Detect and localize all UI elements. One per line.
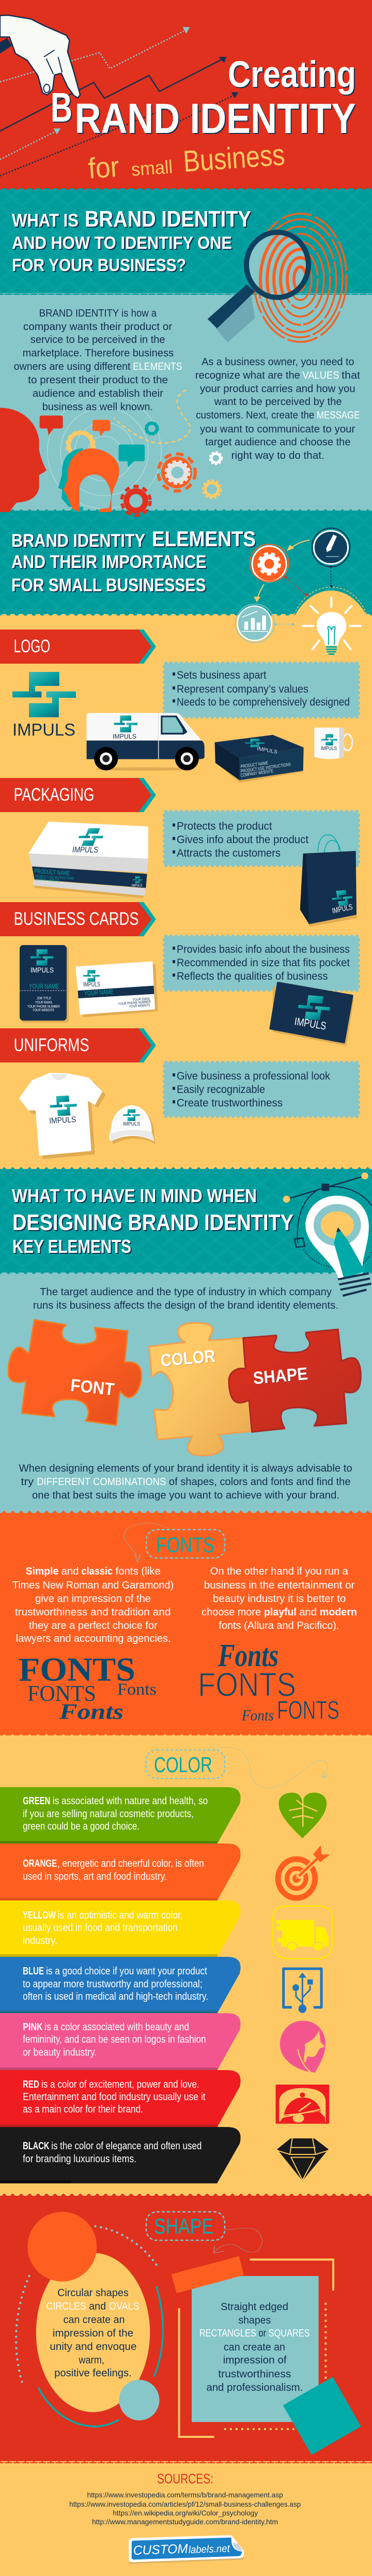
- text block: simple and classic fonts: they are a perfect choice for: [29, 1620, 158, 1631]
- business card: vertical navy: JOB TITLE: [37, 997, 51, 1000]
- panel: business cards: [0, 902, 359, 1046]
- banner: uniforms: UNIFORMS: [14, 1035, 89, 1055]
- heading: what is brand identity: FOR YOUR BUSINESS?: [12, 256, 186, 275]
- title: [51, 54, 356, 185]
- logo: customlabels.net sticker: CUSTOM: [133, 2541, 188, 2558]
- icon: fingerprint under magnifying glass: [208, 214, 347, 342]
- icon: mug: IMPULS: [321, 746, 337, 752]
- text: circular shapes: can create an: [64, 2314, 125, 2326]
- banner: business cards: [0, 902, 156, 936]
- icon: product box: COMPANY WEBSITE: [240, 768, 274, 778]
- heading: what is brand identity: [12, 206, 251, 275]
- color band: black: for branding luxurious items.: [23, 2153, 136, 2165]
- color band: blue: often is used in medical and high-tech industry.: [23, 1991, 208, 2002]
- title: Business: [182, 138, 286, 178]
- heading: brand identity elements: FOR SMALL BUSINESSES: [11, 575, 206, 595]
- decorative ovals and arcs: [16, 2212, 163, 2427]
- text block: simple and classic fonts: trustworthiness and tradition and: [15, 1607, 171, 1618]
- color band: pink: femininity, and can be seen on logos in fashion: [23, 2034, 206, 2045]
- text block: brand identity definition: [14, 308, 182, 413]
- decorative rectangles and lines: [171, 2256, 361, 2455]
- color band: green: GREEN: [23, 1795, 50, 1807]
- heading: what is brand identity: BRAND IDENTITY: [85, 206, 251, 232]
- text: straight edged shapes: SQUARES: [269, 2328, 310, 2339]
- bullet list: logo: [164, 663, 359, 717]
- color band: blue: BLUE: [23, 1966, 44, 1977]
- text block: simple and classic fonts: give an impression of the: [35, 1593, 151, 1605]
- business card: vertical navy: YOUR NAME: [29, 982, 59, 990]
- bullet list: uniforms: Give business a professional look: [177, 1070, 330, 1082]
- font samples: classic: Fonts: [59, 1700, 123, 1724]
- banner: business cards: BUSINESS CARDS: [14, 909, 139, 929]
- font samples: playful: Fonts: [218, 1638, 278, 1673]
- icon: mug: [314, 728, 352, 759]
- text: circular shapes: CIRCLES: [47, 2301, 86, 2312]
- text: circular shapes: warm,: [78, 2355, 104, 2366]
- text block: playful and modern fonts: modern: [320, 1607, 357, 1618]
- business card: horizontal white: YOUR PHONE NUMBER: [118, 1000, 151, 1006]
- bullet list: uniforms: [164, 1062, 359, 1116]
- icon: cap: IMPULS: [123, 1121, 140, 1127]
- text: circular shapes: positive feelings.: [54, 2368, 132, 2379]
- bullet list: packaging: [164, 812, 359, 865]
- font samples: classic: FONTS: [27, 1682, 96, 1706]
- color band: orange: [0, 1844, 241, 1901]
- growth arrows: [0, 27, 238, 176]
- bullet list: packaging: Attracts the customers: [177, 847, 281, 859]
- text: straight edged shapes: shapes: [238, 2315, 271, 2326]
- business card: vertical navy: YOUR WEBSITE: [33, 1009, 54, 1012]
- icon: delivery van: IMPULS: [113, 732, 136, 740]
- logo mark: impuls: IMPULS: [12, 720, 75, 739]
- text block: simple and classic fonts: [12, 1566, 174, 1644]
- label: fonts: FONTS: [156, 1533, 214, 1557]
- icon: product box: [214, 735, 304, 783]
- text: straight edged shapes: impression of: [223, 2355, 287, 2366]
- color band: pink: [0, 2013, 241, 2071]
- font samples: playful: FONTS: [277, 1696, 339, 1725]
- bullet list: packaging: Protects the product: [177, 820, 272, 832]
- text block: simple and classic fonts: fonts (like: [116, 1566, 161, 1577]
- color band: orange: ORANGE: [23, 1858, 57, 1869]
- text block: values and message: your product carries and how you: [200, 383, 355, 395]
- text block: simple and classic fonts: Times New Roman and Garamond): [12, 1580, 174, 1591]
- text: straight edged shapes: [199, 2301, 310, 2393]
- label: color: COLOR: [154, 1753, 212, 1777]
- icon: shopping bag: [300, 835, 357, 927]
- text block: different combinations: of shapes, colors and fonts and find the: [169, 1476, 351, 1488]
- business card: horizontal white: YOUR WEBSITE: [129, 1004, 150, 1009]
- color band: red: [0, 2070, 241, 2128]
- bullet list: business cards: Provides basic info about the business: [177, 943, 350, 955]
- sources: [69, 2471, 301, 2526]
- text block: playful and modern fonts: business in the entertainment or: [204, 1580, 355, 1591]
- icon: product box: PRODUCT NAME: [240, 760, 269, 769]
- color band: pink: or beauty industry.: [23, 2047, 97, 2058]
- color band: blue: [0, 1957, 241, 2014]
- sources: https://en.wikipedia.org/wiki/Color_psychology: [113, 2509, 258, 2517]
- bullet list: logo: Represent company’s values: [177, 683, 308, 695]
- icon: delivery truck: [273, 1906, 332, 1959]
- text block: different combinations: one that best suits the image you want to achieve with your brand.: [32, 1490, 339, 1501]
- text block: playful and modern fonts: On the other hand if you run a: [210, 1566, 349, 1577]
- text block: playful and modern fonts: beauty industry it is better to: [213, 1593, 346, 1605]
- icon: t-shirt: [19, 1073, 105, 1159]
- logo: customlabels.net sticker: labels.net: [188, 2543, 230, 2556]
- business card: vertical navy: [19, 945, 69, 1023]
- label: color: [146, 1747, 329, 1788]
- text block: values and message: As a business owner, you need to: [202, 356, 354, 368]
- text block: playful and modern fonts: and: [299, 1607, 317, 1618]
- text: circular shapes: impression of the: [53, 2328, 133, 2339]
- business card: horizontal white: [76, 962, 158, 1017]
- color band: red: Entertainment and food industry usually use it: [23, 2091, 206, 2103]
- font samples: classic: FONTS: [19, 1651, 135, 1688]
- text block: simple and classic fonts: and: [61, 1566, 79, 1577]
- color band: orange: used in sports, art and food industry.: [23, 1871, 167, 1882]
- text block: target audience: [33, 1286, 338, 1311]
- text: straight edged shapes: trustworthiness: [218, 2369, 291, 2380]
- icon: product box: PRODUCT USE INSTRUCTIONS: [240, 761, 291, 774]
- heading: what to have in mind: [12, 1185, 293, 1257]
- text block: brand identity definition: service to be perceived in the: [30, 334, 165, 346]
- icon: white packaging box: IMPULS: [72, 846, 98, 855]
- text: straight edged shapes: or: [258, 2328, 266, 2339]
- text: circular shapes: OVALS: [109, 2301, 140, 2312]
- icon: diamond: [277, 2138, 329, 2181]
- banner: packaging: PACKAGING: [14, 785, 95, 805]
- text block: simple and classic fonts: classic: [82, 1566, 113, 1577]
- color band: black: is the color of elegance and often used: [51, 2140, 202, 2152]
- label: fonts: [124, 1523, 225, 1562]
- text: circular shapes: and: [89, 2301, 106, 2312]
- text block: brand identity definition: BRAND IDENTITY is how a: [39, 308, 157, 319]
- text block: brand identity definition: marketplace. Therefore business: [23, 348, 174, 359]
- heading: brand identity elements: [11, 527, 256, 595]
- icon: cap: [110, 1105, 156, 1144]
- color band: orange: , energetic and cheerful color, is often: [57, 1858, 204, 1869]
- font samples: playful: Fonts: [241, 1707, 274, 1724]
- label: shape: SHAPE: [154, 2214, 213, 2238]
- icon: usb: [284, 1969, 321, 2013]
- icon: target with arrow: [278, 1845, 330, 1898]
- text block: brand identity definition: company wants their product or: [23, 321, 173, 333]
- text: circular shapes: unity and envoque: [50, 2341, 136, 2353]
- logo mark: impuls: [12, 672, 76, 739]
- heading: brand identity elements: ELEMENTS: [152, 527, 256, 551]
- color band: black: BLACK: [23, 2140, 50, 2152]
- color band: green: [0, 1787, 241, 1844]
- text block: different combinations: [19, 1463, 352, 1501]
- text block: playful and modern fonts: choose more: [202, 1607, 261, 1618]
- text block: values and message: MESSAGE: [317, 410, 360, 421]
- business card: vertical navy: YOUR EMAIL: [35, 1001, 53, 1005]
- heading: what is brand identity: AND HOW TO IDENTIFY ONE: [12, 233, 232, 253]
- text block: values and message: VALUES: [302, 370, 339, 381]
- panel: logo: [0, 630, 359, 783]
- bullet list: business cards: Reflects the qualities of business: [177, 970, 328, 982]
- color band: green: if you are selling natural cosmetic products,: [23, 1808, 194, 1820]
- panel: uniforms: [0, 1028, 359, 1159]
- color band: yellow: YELLOW: [23, 1910, 56, 1921]
- logo: customlabels.net sticker: [129, 2535, 244, 2564]
- text block: target audience: runs its business affects the design of the brand identity elements.: [33, 1300, 338, 1311]
- icon: white packaging box: COMPANY WEBSITE: [35, 878, 59, 883]
- icon: white packaging box: [28, 821, 148, 898]
- label: shape: SHAPE: [252, 1364, 308, 1388]
- color band: pink: PINK: [23, 2021, 43, 2033]
- panel: circular shapes: [16, 2212, 163, 2427]
- icon: leaf: [278, 1793, 327, 1838]
- text block: different combinations: When designing elements of your brand identity it is always advisable to: [19, 1463, 352, 1474]
- banner: logo: LOGO: [14, 636, 50, 656]
- text: straight edged shapes: RECTANGLES: [199, 2328, 256, 2339]
- text: circular shapes: [47, 2287, 140, 2379]
- text block: values and message: that: [342, 370, 360, 381]
- color band: red: RED: [23, 2079, 39, 2090]
- font samples: classic: Fonts: [117, 1680, 157, 1698]
- text block: target audience: The target audience and the type of industry in which company: [40, 1286, 332, 1298]
- text block: brand identity definition: ELEMENTS: [133, 361, 182, 372]
- color band: green: green could be a good choice.: [23, 1821, 140, 1832]
- color band: yellow: [0, 1900, 241, 1957]
- business card: horizontal white: YOUR NAME: [84, 987, 114, 997]
- color band: yellow: industry.: [23, 1935, 57, 1946]
- text block: values and message: want to be perceived by the: [214, 396, 342, 408]
- heading: what to have in mind: DESIGNING BRAND IDENTITY: [12, 1210, 293, 1235]
- color band: blue: is a good choice if you want your product: [46, 1966, 207, 1977]
- color band: yellow: is an optimistic and warm color,: [58, 1910, 183, 1921]
- text block: simple and classic fonts: lawyers and accounting agencies.: [16, 1633, 171, 1644]
- text: straight edged shapes: Straight edged: [221, 2301, 288, 2313]
- text block: different combinations: try: [21, 1476, 34, 1488]
- color band: blue: to appear more trustworthy and professional;: [23, 1979, 203, 1990]
- sources: http://www.managementstudyguide.com/brand-identity.htm: [92, 2518, 278, 2526]
- text block: simple and classic fonts: Simple: [26, 1566, 58, 1577]
- icon: pen tool light bulb: [283, 1173, 372, 1296]
- icon: white packaging box: IMPULS: [132, 884, 142, 888]
- bullet list: business cards: [164, 936, 359, 990]
- title: small: [131, 156, 173, 180]
- heading: brand identity elements: BRAND IDENTITY: [11, 531, 145, 551]
- text block: brand identity definition: to present their product to the: [28, 375, 168, 386]
- text block: playful and modern fonts: fonts (Allura and Pacifico).: [219, 1620, 339, 1631]
- business card: horizontal white: YOUR EMAIL: [133, 997, 150, 1002]
- panel: straight edged shapes: [171, 2256, 361, 2455]
- icon: hand walking on arrow: [0, 15, 80, 98]
- color band: pink: is a color associated with beauty and: [44, 2021, 189, 2033]
- text block: values and message: customers. Next, create the: [196, 410, 314, 421]
- color band: black: [0, 2127, 241, 2183]
- icon: product box: IMPULS: [256, 746, 278, 755]
- text block: values and message: target audience and choose the: [205, 437, 350, 448]
- sources: https://www.investopedia.com/articles/pf/12/small-business-challenges.asp: [69, 2500, 301, 2508]
- color band: yellow: usually used in food and transportation: [23, 1922, 178, 1934]
- heading: brand identity elements: AND THEIR IMPORTANCE: [11, 552, 206, 572]
- text: circular shapes: Circular shapes: [57, 2287, 129, 2299]
- font samples: playful: [198, 1638, 339, 1725]
- icon: delivery van: [87, 713, 205, 771]
- icon: shopping bag: IMPULS: [331, 903, 353, 916]
- color band: red: as a main color for their brand.: [23, 2104, 143, 2115]
- label: shape: [146, 2212, 262, 2253]
- icons: process diagram with light bulb: [236, 528, 368, 654]
- bullet list: uniforms: Create trustworthiness: [177, 1097, 283, 1109]
- puzzle pieces: font, color, shape: [8, 1320, 361, 1456]
- text block: brand identity definition: business as well known.: [42, 401, 153, 413]
- text block: brand identity definition: owners are using different: [14, 361, 131, 372]
- icon: t-shirt: IMPULS: [49, 1115, 76, 1126]
- bullet list: packaging: Gives info about the product: [177, 834, 308, 846]
- label: font: FONT: [70, 1375, 115, 1400]
- business card: tilted navy: [270, 983, 354, 1046]
- business card: vertical navy: IMPULS: [30, 966, 54, 974]
- color band: green: is associated with nature and health, so: [53, 1795, 208, 1807]
- panel: packaging: [0, 778, 359, 927]
- text block: playful and modern fonts: [202, 1566, 357, 1631]
- font samples: classic: [19, 1651, 157, 1724]
- sources: SOURCES:: [157, 2471, 213, 2487]
- business card: vertical navy: YOUR PHONE NUMBER: [27, 1005, 60, 1009]
- bullet list: uniforms: Easily recognizable: [177, 1084, 265, 1096]
- text: straight edged shapes: and professionalism.: [206, 2382, 303, 2393]
- text block: values and message: right way to do that.: [231, 450, 324, 461]
- text block: values and message: you want to communicate to your: [200, 424, 355, 435]
- text block: brand identity definition: audience and establish their: [33, 388, 163, 399]
- bullet list: business cards: Recommended in size that fits pocket: [177, 957, 350, 969]
- font samples: playful: FONTS: [198, 1666, 296, 1703]
- heading: what to have in mind: WHAT TO HAVE IN MIND WHEN: [12, 1185, 257, 1206]
- text block: values and message: [195, 356, 360, 461]
- text block: values and message: recognize what are the: [195, 370, 300, 381]
- text: straight edged shapes: can create an: [224, 2342, 285, 2353]
- title: for: [87, 150, 120, 185]
- icon: dining cloche: [275, 2085, 329, 2124]
- icon: white packaging box: PRODUCT NAME: [34, 867, 70, 877]
- heading: what is brand identity: WHAT IS: [12, 211, 79, 231]
- icon: woman profile: [280, 2021, 326, 2073]
- label: color: COLOR: [160, 1346, 216, 1371]
- banner: packaging: [0, 778, 156, 812]
- color band: red: is a color of excitement, power and love.: [41, 2079, 199, 2090]
- sources: https://www.investopedia.com/terms/b/brand-management.asp: [87, 2491, 283, 2499]
- illustration: heads, gears and speech bubbles: [0, 390, 222, 515]
- bullet list: logo: Needs to be comprehensively designed: [177, 696, 350, 708]
- text block: playful and modern fonts: playful: [264, 1607, 297, 1618]
- banner: uniforms: [0, 1028, 156, 1062]
- title: B: [51, 84, 72, 130]
- icon: white packaging box: PRODUCT USE INSTRUCTIONS: [35, 875, 74, 881]
- heading: what to have in mind: KEY ELEMENTS: [12, 1236, 131, 1257]
- business card: tilted navy: IMPULS: [293, 1015, 327, 1032]
- banner: logo: [0, 630, 156, 664]
- text block: different combinations: DIFFERENT COMBINATIONS: [37, 1476, 166, 1488]
- bullet list: logo: Sets business apart: [177, 669, 267, 681]
- business card: horizontal white: IMPULS: [83, 981, 100, 988]
